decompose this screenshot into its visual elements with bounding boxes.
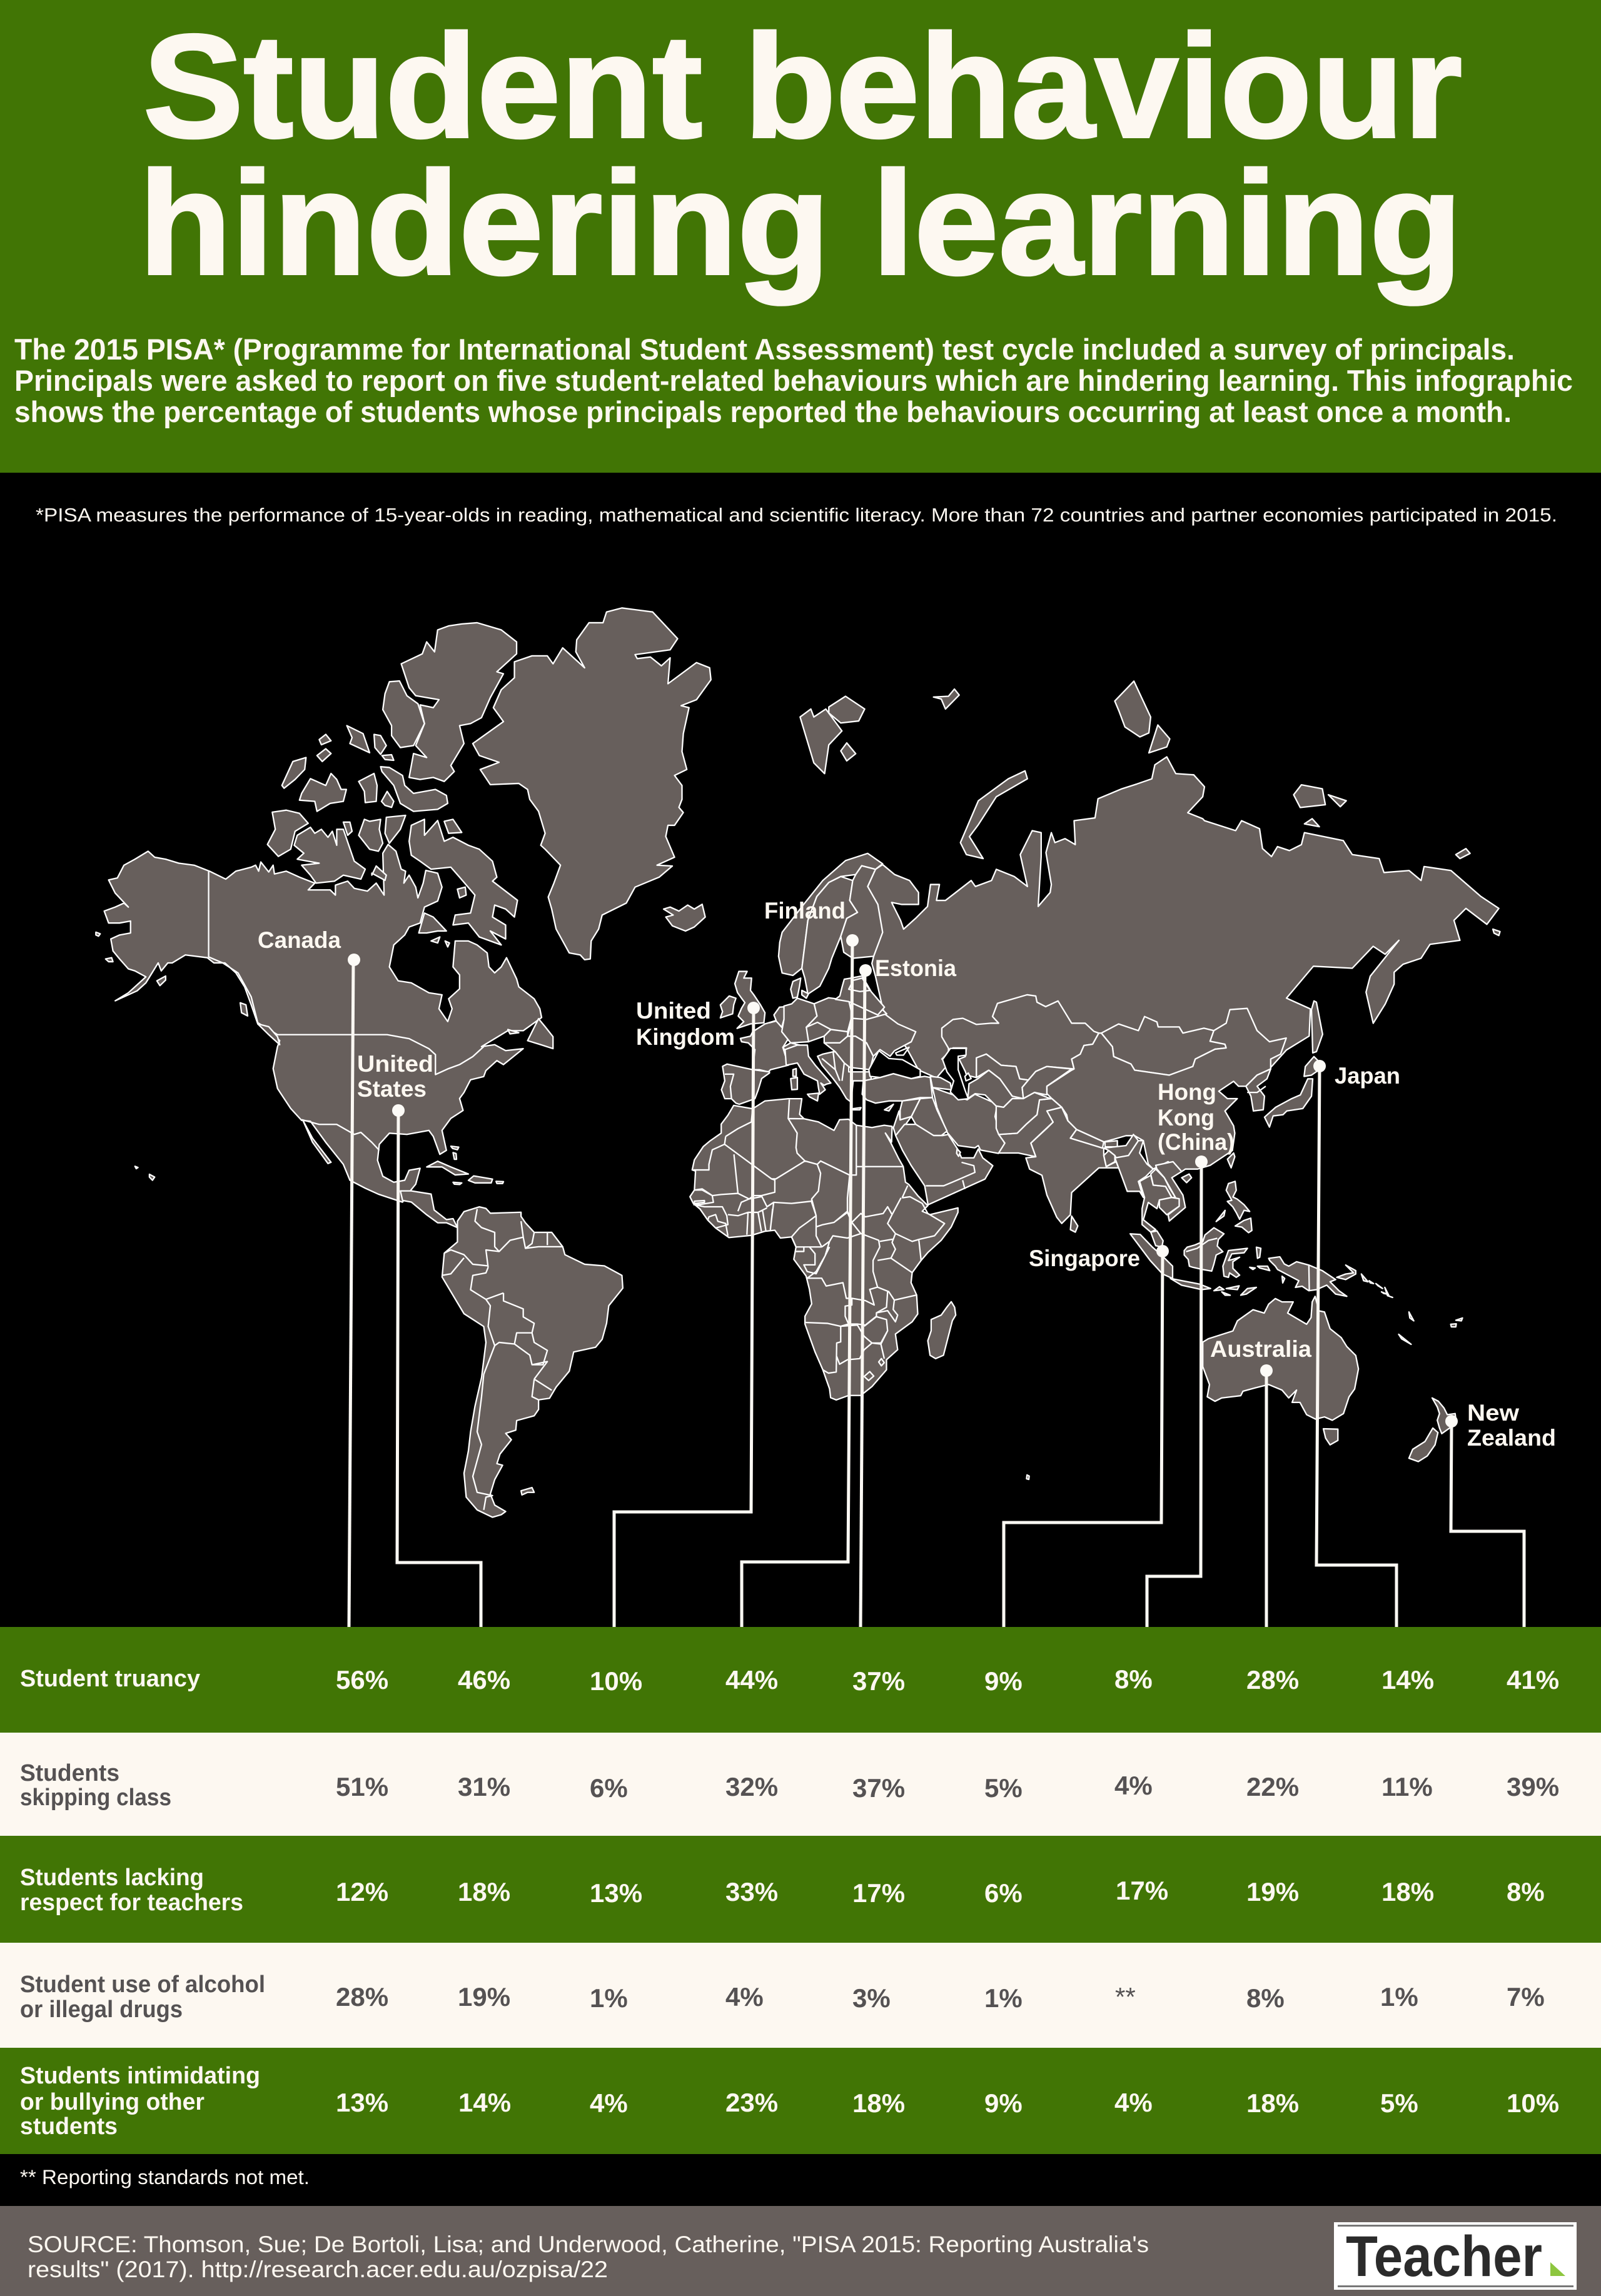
table row: student truancy [0,1627,1601,1733]
country labels: Finland [764,898,846,924]
table row: student truancy: 28% [1246,1665,1299,1694]
table row: student use of alcohol or illegal drugs: 8% [1246,1983,1285,2013]
table row: student use of alcohol or illegal drugs: ** [1115,1982,1136,2012]
table row: student use of alcohol or illegal drugs: 19% [458,1982,510,2012]
country labels: Singapore [1029,1246,1140,1271]
table row: students intimidating or bullying other students: students [20,2113,118,2140]
table row: students intimidating or bullying other students: 9% [984,2088,1023,2118]
table row: students lacking respect for teachers: 6% [984,1878,1023,1908]
logo: Teacher: Teacher [1346,2225,1542,2288]
intro text [14,333,1573,428]
table row: students skipping class: 22% [1246,1772,1299,1801]
table row: student truancy: 8% [1114,1664,1153,1694]
country labels: New [1467,1400,1519,1426]
source text: results" (2017). http://research.acer.edu.au/ozpisa/22 [28,2257,608,2282]
table row: student use of alcohol or illegal drugs: 4% [725,1982,764,2012]
table row: student use of alcohol or illegal drugs: 1% [1380,1982,1418,2012]
table row: students intimidating or bullying other students: 4% [590,2088,628,2118]
table row: students skipping class: 5% [984,1773,1023,1803]
intro text: Principals were asked to report on five student-related behaviours which are hindering learning. This infographic [14,364,1573,397]
table row: students intimidating or bullying other students: 23% [725,2088,778,2117]
map: Russia and Arctic Eurasia [779,681,1500,1078]
footnote: reporting standards: ** Reporting standards not met. [20,2166,310,2188]
title [139,4,1462,305]
table row: students intimidating or bullying other students: Students intimidating [20,2063,260,2089]
table row: students intimidating or bullying other students: 18% [852,2088,905,2118]
map: North America and Greenland [96,608,711,1202]
table row: student truancy: 37% [852,1666,905,1696]
table row: students lacking respect for teachers: 17% [1116,1876,1168,1905]
location dots [348,934,1458,1427]
country labels: Australia [1210,1336,1311,1362]
map: Africa [690,1099,958,1400]
map: Caspian and Aral seas [942,1049,971,1100]
country labels: Estonia [875,955,956,981]
table row: students lacking respect for teachers [0,1836,1601,1943]
country labels: United [357,1051,433,1077]
intro text: shows the percentage of students whose principals reported the behaviours occurring at least once a month. [14,395,1512,428]
country labels: Canada [258,927,341,953]
table row: student use of alcohol or illegal drugs: 1% [984,1983,1023,2013]
table row: students skipping class: 4% [1114,1771,1153,1800]
map: Europe and Middle East [720,972,1005,1205]
country labels: United [636,998,711,1024]
table row: student truancy: 44% [725,1665,778,1694]
title: hindering learning [139,141,1462,305]
source text: SOURCE: Thomson, Sue; De Bortoli, Lisa; and Underwood, Catherine, "PISA 2015: Reporting Australia's [28,2232,1149,2257]
country labels: (China) [1158,1129,1235,1155]
map: South America and Caribbean [400,1146,623,1518]
source panel [0,2206,1601,2296]
table row: student use of alcohol or illegal drugs: 28% [336,1982,388,2012]
title: Student behaviour [143,4,1462,168]
table row: students intimidating or bullying other students [0,2048,1601,2154]
table row: students skipping class: 37% [852,1773,905,1803]
footnote: PISA: *PISA measures the performance of 15-year-olds in reading, mathematical and scientific literacy. More than 72 countries and partner economies participated in 2015. [36,504,1557,526]
country labels: Zealand [1467,1425,1556,1451]
table row: students intimidating or bullying other students: 18% [1246,2088,1299,2118]
table row: student use of alcohol or illegal drugs: 7% [1507,1982,1545,2012]
table row: students skipping class: 39% [1507,1772,1559,1801]
table row: students intimidating or bullying other students: 13% [336,2088,388,2117]
table row: students intimidating or bullying other students: 14% [458,2088,511,2117]
table row: students intimidating or bullying other students: 10% [1507,2088,1559,2118]
table row: students intimidating or bullying other students: or bullying other [20,2089,205,2115]
table row: students skipping class: 32% [725,1772,778,1801]
table row: student use of alcohol or illegal drugs [0,1943,1601,2048]
table row: students lacking respect for teachers: 13% [590,1878,642,1908]
table row: student use of alcohol or illegal drugs: 1% [590,1983,628,2013]
table row: students skipping class: 31% [458,1772,510,1801]
table row: student truancy: 9% [984,1666,1023,1696]
world map [96,608,1500,1518]
intro text: The 2015 PISA* (Programme for International Student Assessment) test cycle included a survey of principals. [14,333,1515,366]
table row: students skipping class: 6% [590,1773,628,1803]
table row: student truancy: 56% [336,1665,388,1694]
country labels: Kong [1158,1105,1215,1130]
table row: students skipping class: skipping class [20,1785,171,1811]
table row: students lacking respect for teachers: respect for teachers [20,1890,243,1916]
table row: students skipping class [0,1733,1601,1836]
table row: students skipping class: 11% [1381,1772,1433,1801]
leader lines [349,940,1524,1627]
table row: students lacking respect for teachers: Students lacking [20,1865,204,1891]
table row: students skipping class: 51% [336,1772,388,1801]
country labels: States [357,1076,427,1102]
table row: student truancy: Student truancy [20,1666,200,1692]
map: Central, South and East Asia [942,995,1324,1247]
table row: student use of alcohol or illegal drugs: 3% [852,1983,891,2013]
table row: students lacking respect for teachers: 18% [1381,1877,1434,1906]
table row: students skipping class: Students [20,1760,119,1786]
table row: student truancy: 14% [1381,1665,1434,1694]
map: Southeast Asia and Oceania [1026,1181,1463,1479]
table row: student truancy: 41% [1507,1665,1559,1694]
table row: student use of alcohol or illegal drugs: Student use of alcohol [20,1971,265,1998]
table row: students lacking respect for teachers: 18% [458,1877,510,1906]
table row: student truancy: 10% [590,1666,642,1696]
table row: students lacking respect for teachers: 19% [1246,1877,1299,1906]
header panel [0,0,1601,473]
country labels: Hong [1158,1079,1216,1105]
table row: student use of alcohol or illegal drugs: or illegal drugs [20,1996,183,2023]
table row: student truancy: 46% [458,1665,510,1694]
table row: students lacking respect for teachers: 12% [336,1877,388,1906]
table row: students intimidating or bullying other students: 5% [1380,2088,1418,2118]
table row: students lacking respect for teachers: 33% [725,1877,778,1906]
country labels [258,898,1556,1451]
country labels: Japan [1335,1063,1400,1089]
source text [28,2232,1149,2282]
table row: students intimidating or bullying other students: 4% [1114,2088,1153,2117]
country labels: Kingdom [636,1024,735,1050]
table row: students lacking respect for teachers: 8% [1507,1877,1545,1906]
table row: students lacking respect for teachers: 17% [852,1878,905,1908]
